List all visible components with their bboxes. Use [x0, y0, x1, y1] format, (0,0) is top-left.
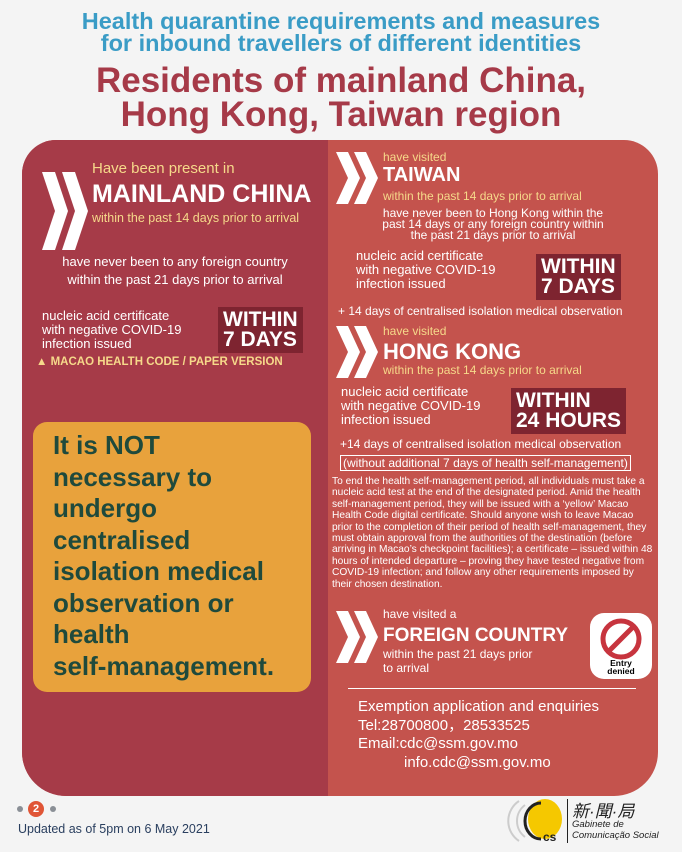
text: within 14 days: within the past 14 days prior to arrival	[383, 363, 582, 377]
text: have visited: have visited	[383, 324, 446, 338]
text: within 14 days: within the past 14 days prior to arrival	[92, 211, 299, 225]
callout: not necessary: undergo	[53, 493, 157, 523]
page indicator	[17, 801, 56, 817]
icon: chevrons foreign	[336, 611, 378, 663]
text: never foreign: within the past 21 days prior to arrival	[67, 272, 283, 287]
badge: within 24 hours: 24 HOURS	[516, 409, 621, 432]
text: within 21 days	[383, 647, 532, 675]
heading: foreign country: FOREIGN COUNTRY	[383, 625, 568, 646]
text: nucleic certificate: infection issued	[341, 412, 431, 427]
icon: entry denied: denied	[607, 666, 635, 676]
text: have visited: have visited	[383, 150, 446, 164]
text: macao health code: ▲ MACAO HEALTH CODE / PAPER VERSION	[36, 356, 283, 368]
text: never HK	[382, 206, 604, 242]
badge: within 7 days: WITHIN	[541, 255, 616, 278]
text block: enquiries: Exemption application and enquiries	[358, 698, 599, 715]
callout: not necessary: health	[53, 619, 130, 649]
text: nucleic certificate	[341, 384, 480, 427]
text: never HK: the past 21 days prior to arrival	[411, 228, 575, 242]
text: have been present: Have been present in	[92, 160, 235, 177]
text: updated: Updated as of 5pm on 6 May 2021	[18, 822, 210, 836]
text: nucleic certificate: infection issued	[42, 336, 132, 351]
icon: chevrons mainland	[42, 172, 88, 250]
title: for inbound travellers of different identities	[101, 30, 581, 56]
text: nucleic certificate	[356, 248, 495, 291]
callout: not necessary: necessary to	[53, 462, 212, 492]
badge: within 24 hours	[511, 388, 626, 434]
badge: within 7 days: 7 DAYS	[223, 328, 297, 351]
text: nucleic certificate: with negative COVID-19	[356, 262, 495, 277]
text block: enquiries	[358, 698, 599, 770]
icon: chevrons hk	[336, 326, 378, 378]
text: plus 14 days: + 14 days of centralised isolation medical observation	[338, 304, 622, 318]
text: nucleic certificate	[42, 308, 181, 351]
text: within 14 days: within the past 14 days prior to arrival	[383, 189, 582, 203]
heading: mainland china: MAINLAND CHINA	[92, 180, 311, 208]
icon: entry denied: Entry	[610, 658, 632, 668]
text: never HK: past 14 days or any foreign country within	[382, 217, 604, 231]
heading: taiwan: TAIWAN	[383, 164, 460, 186]
text: never foreign: have never been to any foreign country	[62, 254, 288, 269]
badge: within 7 days: 7 DAYS	[541, 275, 615, 298]
text: nucleic certificate: with negative COVID-19	[42, 322, 181, 337]
text: nucleic certificate: infection issued	[356, 276, 446, 291]
icon: entry denied	[590, 613, 652, 679]
main panel	[22, 140, 658, 796]
text: nucleic certificate: nucleic acid certificate	[341, 384, 468, 399]
page indicator: 2	[33, 803, 39, 815]
text block: enquiries: Email:cdc@ssm.gov.mo	[358, 735, 518, 752]
panel: hong kong	[336, 324, 631, 471]
text: never foreign	[62, 254, 288, 287]
callout: not necessary: centralised	[53, 524, 190, 554]
divider	[348, 688, 636, 689]
text: within 21 days: to arrival	[383, 661, 429, 675]
text block: enquiries: Tel:28700800，28533525	[358, 716, 530, 734]
logo: GCS	[507, 799, 659, 844]
panel: taiwan	[336, 150, 622, 318]
icon: chevrons taiwan	[336, 152, 378, 204]
text: never HK: have never been to Hong Kong within the	[383, 206, 603, 220]
text block: self-management rules: To end the health self-management period, all individuals must take a nucleic acid test at the end of the designated period. Amid the health self-management period, they will be issued with a ‘yellow’ Macao Health Code digital certificate. Should anyone wish to leave Macao prior to the completion of their period of health self-management, they must obtain approval from the authorities of the destination (before arriving in Macao’s checkpoint facilities); a certificate – issued within 48 hours of intended departure – proving they have tested negative from COVID-19 infection; and follow any other requirements imposed by their chosen destination.	[332, 476, 652, 590]
callout: not necessary: It is NOT	[53, 430, 160, 460]
callout: not necessary: isolation medical	[53, 556, 264, 586]
text block: enquiries: info.cdc@ssm.gov.mo	[404, 754, 551, 770]
text: nucleic certificate: nucleic acid certificate	[42, 308, 169, 323]
text: without self management: (without additional 7 days of health self-management)	[343, 456, 628, 470]
callout: not necessary	[33, 422, 311, 692]
text: within 21 days: within the past 21 days prior	[383, 647, 532, 661]
badge: within 7 days	[536, 254, 621, 300]
text: nucleic certificate: with negative COVID-19	[341, 398, 480, 413]
logo: GCS: Gabinete de	[572, 819, 624, 830]
text: nucleic certificate: nucleic acid certificate	[356, 248, 483, 263]
heading: hong kong: HONG KONG	[383, 339, 521, 364]
badge: within 7 days: WITHIN	[223, 308, 298, 331]
badge: within 7 days	[218, 307, 303, 353]
logo: GCS: cs	[543, 830, 557, 844]
text: plus 14 days: +14 days of centralised isolation medical observation	[340, 437, 621, 451]
title: Health quarantine requirements and measures	[82, 8, 600, 34]
subtitle: Hong Kong, Taiwan region	[121, 95, 561, 134]
callout: not necessary: self-management.	[53, 650, 274, 680]
callout: not necessary: observation or	[53, 588, 234, 618]
logo: GCS: Comunicação Social	[572, 830, 659, 841]
badge: within 24 hours: WITHIN	[516, 389, 591, 412]
logo: GCS: 新·聞·局	[572, 802, 634, 821]
panel: foreign country	[336, 607, 652, 679]
subtitle: Residents of mainland China,	[96, 61, 586, 100]
title	[82, 8, 600, 56]
panel: mainland china	[36, 160, 311, 368]
text: have visited a: have visited a	[383, 607, 456, 621]
subtitle	[96, 61, 586, 134]
